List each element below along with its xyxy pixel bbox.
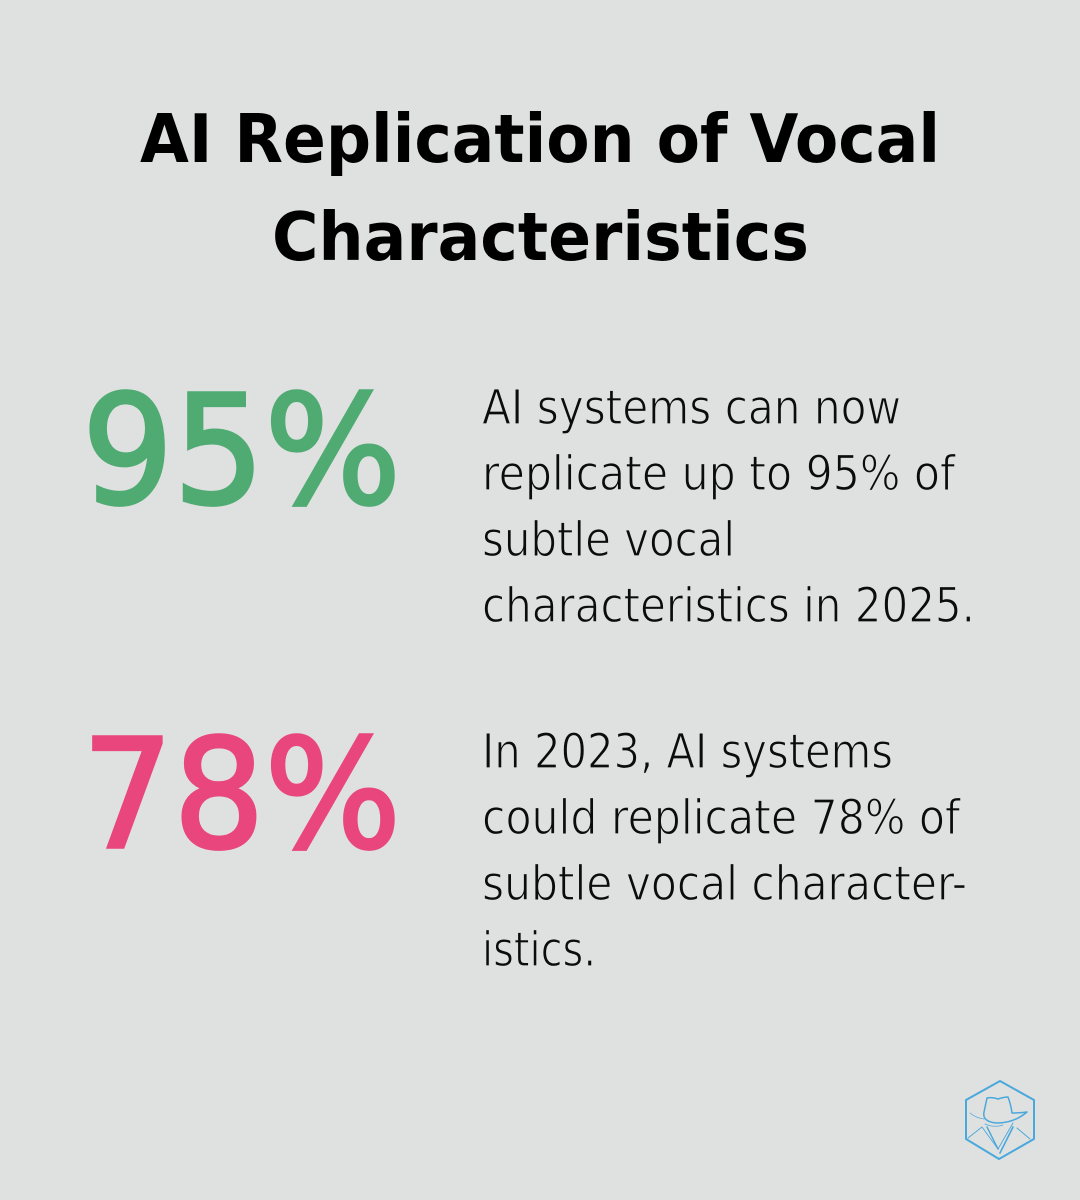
text block: 78% description: could replicate 78% of — [482, 790, 961, 846]
stat number: 95%: 95% — [82, 363, 401, 539]
text block: 95% description: AI systems can now — [482, 380, 901, 436]
text block: 78% description — [482, 724, 967, 978]
icon: hexagon logo with hat and collar — [966, 1081, 1034, 1159]
stat number: 78%: 78% — [82, 707, 401, 883]
text block: 78% description: In 2023, AI systems — [482, 724, 893, 780]
text block: 95% description: replicate up to 95% of — [482, 446, 956, 502]
title — [140, 100, 940, 276]
text block: 78% description: subtle vocal character- — [482, 856, 967, 912]
text block: 95% description: subtle vocal — [482, 512, 735, 568]
title: AI Replication of Vocal — [140, 100, 940, 178]
text block: 95% description: characteristics in 2025. — [482, 578, 975, 634]
text block: 78% description: istics. — [482, 922, 596, 978]
text block: 95% description — [482, 380, 975, 634]
title: Characteristics — [272, 198, 809, 276]
